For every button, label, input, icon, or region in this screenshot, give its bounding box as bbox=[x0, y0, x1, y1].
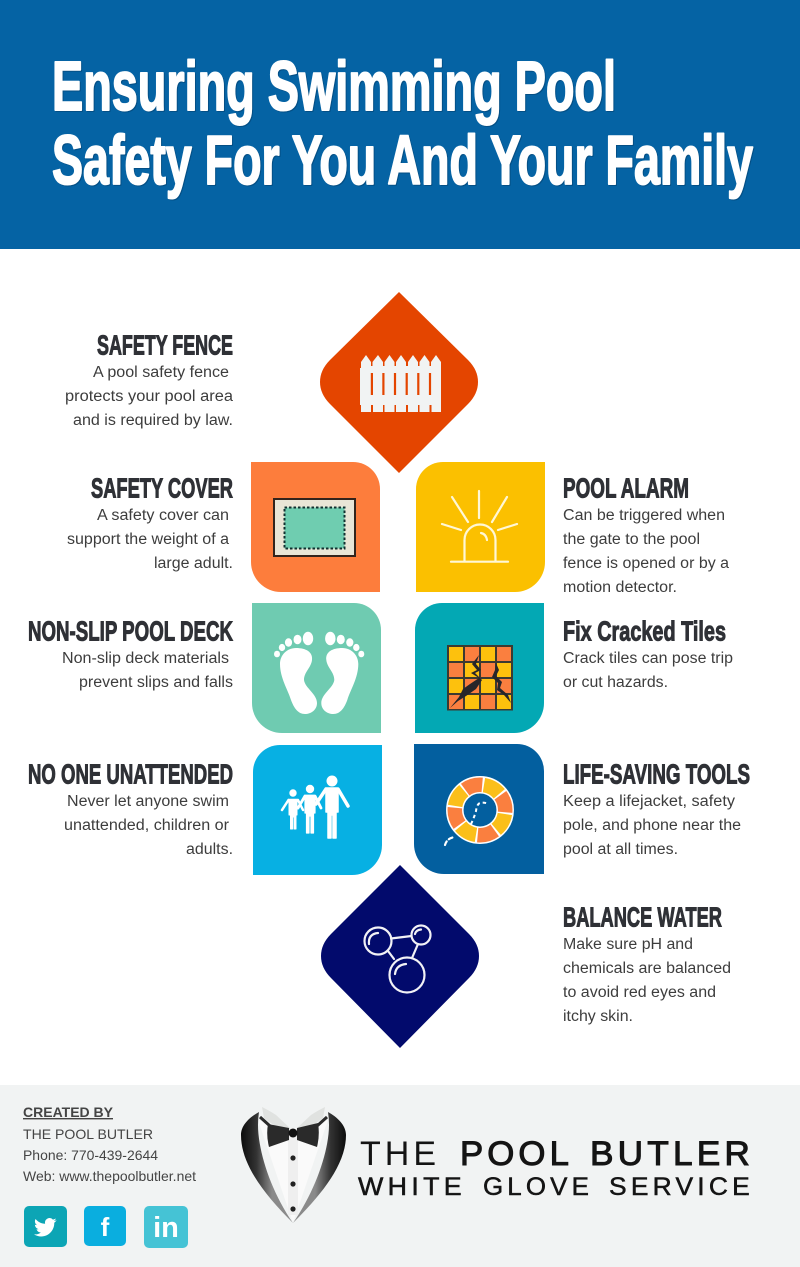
text: balance water: itchy skin. bbox=[563, 1008, 633, 1025]
text: pool alarm: fence is opened or by a bbox=[563, 555, 729, 572]
text: no one unattended bbox=[28, 758, 233, 858]
text: no one unattended: unattended, children or bbox=[64, 817, 229, 834]
icon: linkedin bbox=[144, 1206, 188, 1248]
icon: twitter bbox=[24, 1206, 67, 1247]
panel: non-slip deck tile bbox=[252, 603, 381, 733]
panel: safety fence diamond bbox=[320, 292, 478, 473]
text: life-saving tools bbox=[563, 758, 750, 858]
text: no one unattended: Never let anyone swim bbox=[67, 793, 229, 810]
text: pool alarm: motion detector. bbox=[563, 579, 677, 596]
text: balance water: Make sure pH and bbox=[563, 936, 693, 953]
logo: wordmark: BUTLER bbox=[590, 1135, 754, 1173]
text: credits: Web: www.thepoolbutler.net bbox=[23, 1168, 196, 1184]
panel: balance water diamond bbox=[321, 865, 479, 1048]
text: credits: Phone: 770-439-2644 bbox=[23, 1147, 158, 1163]
logo: wordmark: THE bbox=[360, 1135, 440, 1173]
title bbox=[52, 47, 754, 200]
text: safety cover: large adult. bbox=[154, 555, 233, 572]
header banner bbox=[0, 0, 800, 249]
icon: life ring bbox=[445, 775, 515, 845]
text: safety fence: protects your pool area bbox=[65, 388, 233, 405]
icon: molecule bbox=[364, 926, 430, 992]
text: credits bbox=[23, 1104, 196, 1184]
text: pool alarm: POOL ALARM bbox=[563, 472, 689, 504]
text: credits: THE POOL BUTLER bbox=[23, 1126, 153, 1142]
icon: facebook bbox=[84, 1206, 126, 1246]
text: credits: CREATED BY bbox=[23, 1104, 114, 1120]
logo: wordmark: SERVICE bbox=[609, 1173, 754, 1201]
logo: tuxedo bbox=[241, 1107, 346, 1223]
text: non-slip pool deck: prevent slips and falls bbox=[79, 674, 233, 691]
panel: pool alarm tile bbox=[416, 462, 545, 592]
logo: wordmark: POOL bbox=[460, 1135, 573, 1173]
text: no one unattended: adults. bbox=[186, 841, 233, 858]
text: no one unattended: NO ONE UNATTENDED bbox=[28, 758, 233, 790]
text: balance water bbox=[563, 902, 731, 1025]
text: fix cracked tiles: Crack tiles can pose trip bbox=[563, 650, 733, 667]
panel: life-saving tools tile bbox=[414, 744, 544, 874]
icon: family bbox=[282, 776, 348, 838]
text: balance water: to avoid red eyes and bbox=[563, 984, 716, 1001]
text: safety fence: SAFETY FENCE bbox=[97, 330, 233, 360]
text: safety fence: and is required by law. bbox=[73, 412, 233, 429]
text: non-slip pool deck: Non-slip deck materials bbox=[62, 650, 229, 667]
text: pool alarm bbox=[563, 472, 729, 596]
text: pool alarm: the gate to the pool bbox=[563, 531, 700, 548]
text: fix cracked tiles bbox=[563, 616, 733, 691]
icon: facebook: f bbox=[101, 1212, 110, 1242]
text: life-saving tools: pool at all times. bbox=[563, 841, 678, 858]
text: safety cover: A safety cover can bbox=[97, 507, 229, 524]
logo: wordmark: GLOVE bbox=[483, 1173, 593, 1201]
icon: pool cover bbox=[273, 498, 356, 557]
text: non-slip pool deck: NON-SLIP POOL DECK bbox=[28, 616, 233, 646]
icon: cracked tile grid bbox=[447, 645, 513, 710]
text: balance water: BALANCE WATER bbox=[563, 902, 722, 932]
text: fix cracked tiles: or cut hazards. bbox=[563, 674, 668, 691]
text: pool alarm: Can be triggered when bbox=[563, 507, 725, 524]
icon: footprints bbox=[274, 632, 364, 714]
text: life-saving tools: pole, and phone near the bbox=[563, 817, 741, 834]
panel: footer bbox=[0, 1085, 800, 1267]
text: fix cracked tiles: Fix Cracked Tiles bbox=[563, 616, 726, 646]
text: balance water: chemicals are balanced bbox=[563, 960, 731, 977]
text: safety cover bbox=[67, 472, 233, 572]
icon: alarm light bbox=[442, 491, 517, 562]
panel: cracked tiles tile bbox=[415, 603, 544, 733]
panel: safety cover tile bbox=[251, 462, 380, 592]
logo: wordmark bbox=[358, 1135, 754, 1201]
text: safety fence bbox=[65, 330, 233, 429]
text: non-slip pool deck bbox=[28, 616, 233, 691]
text: safety cover: SAFETY COVER bbox=[91, 472, 233, 504]
panel: no one unattended tile bbox=[253, 745, 382, 875]
text: safety fence: A pool safety fence bbox=[93, 364, 229, 381]
text: life-saving tools: Keep a lifejacket, safety bbox=[563, 793, 735, 810]
icon: linkedin: in bbox=[153, 1212, 179, 1244]
text: safety cover: support the weight of a bbox=[67, 531, 229, 548]
icon: fence bbox=[360, 355, 441, 412]
logo: wordmark: WHITE bbox=[358, 1173, 466, 1201]
